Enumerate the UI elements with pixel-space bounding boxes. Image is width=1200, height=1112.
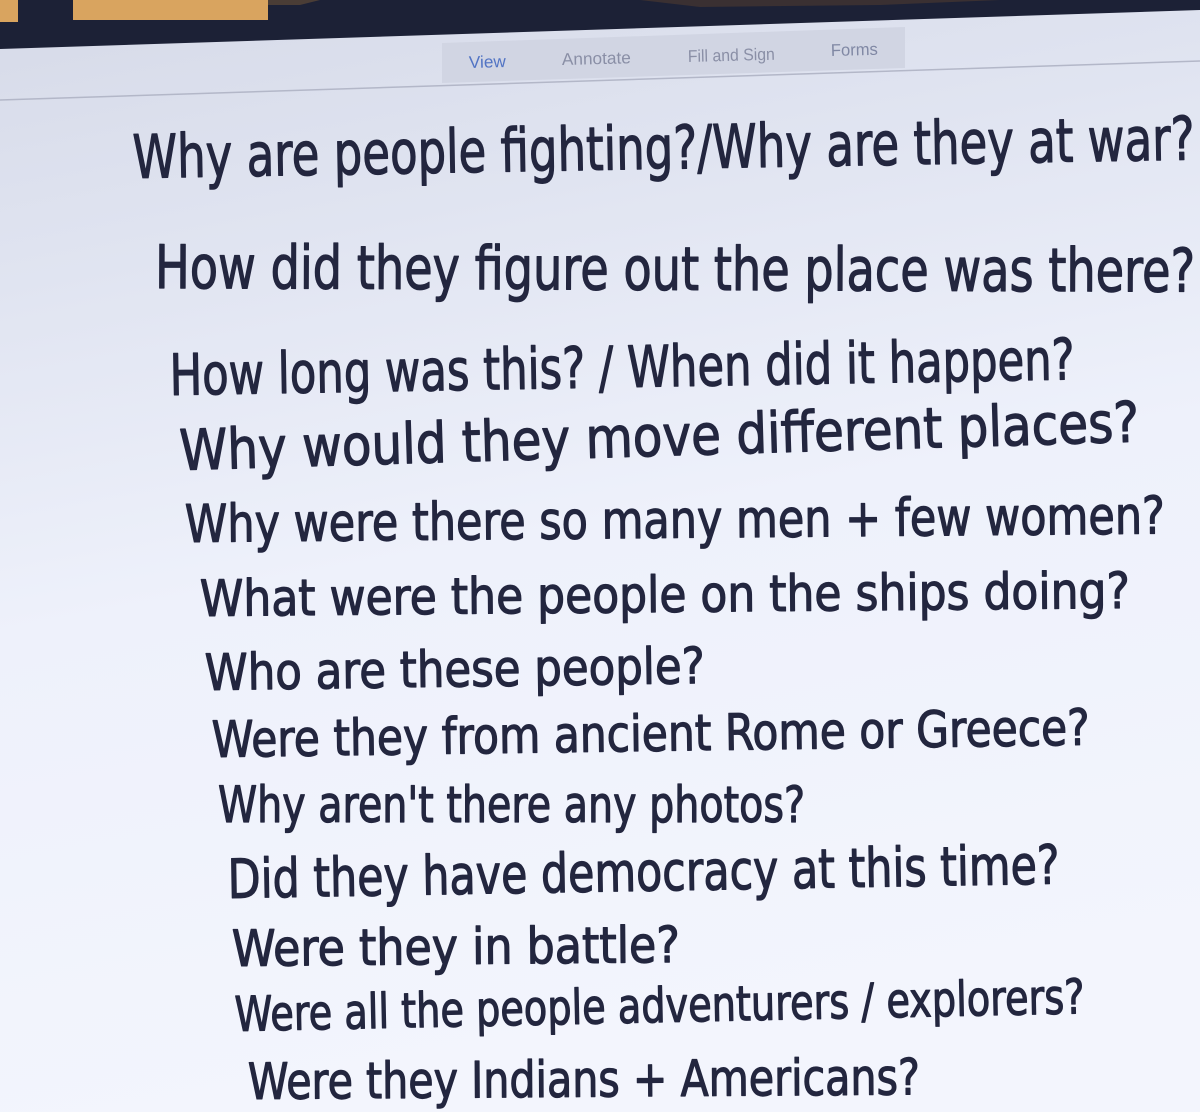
tab labels: Fill and Sign (688, 45, 775, 66)
tab labels (469, 40, 878, 72)
toolbar rule (0, 61, 1200, 100)
dark monitor bezel (0, 0, 1200, 49)
tab labels: View (469, 52, 507, 72)
sticky notes (0, 0, 268, 22)
tab labels: Forms (831, 40, 878, 60)
tab labels: Annotate (562, 48, 631, 69)
toolbar (442, 27, 905, 83)
question 11: Were they in battle? (232, 916, 680, 978)
question 13: Were they Indians + Americans? (248, 1048, 920, 1111)
question 9: Why aren't there any photos? (218, 776, 805, 834)
question 7: Who are these people? (204, 637, 705, 702)
